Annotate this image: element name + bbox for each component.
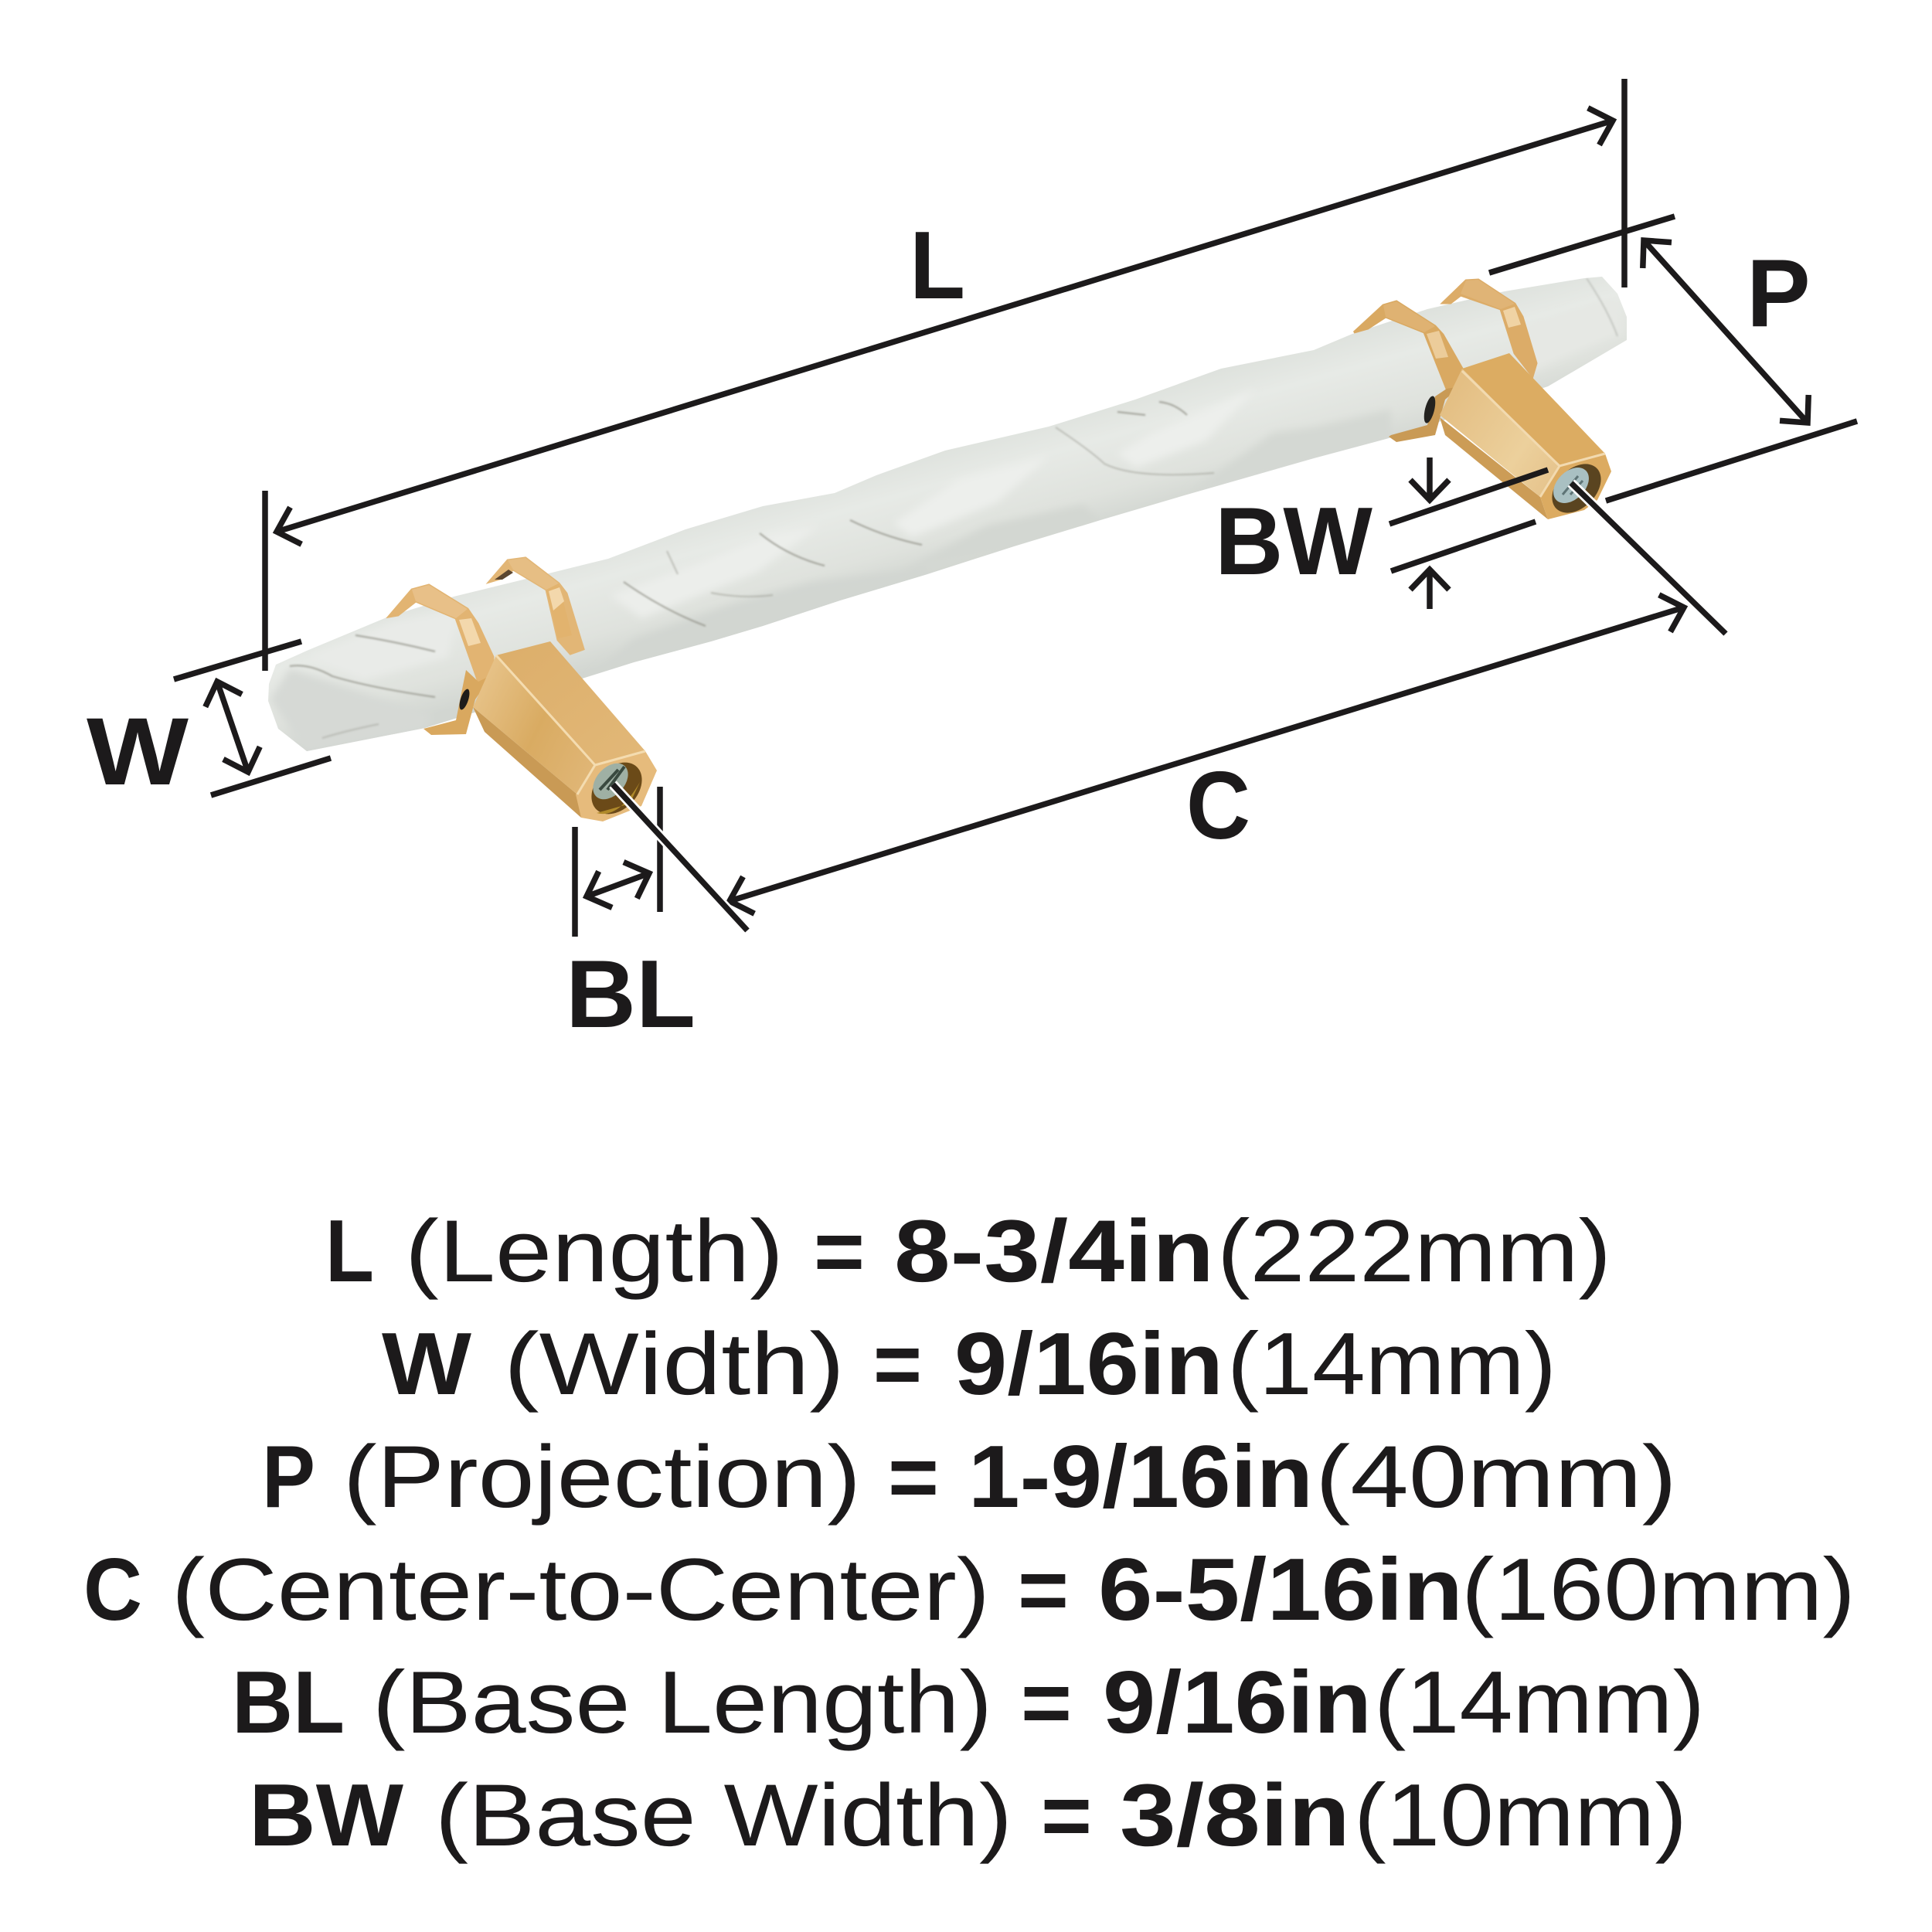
spec: base length — [232, 1654, 1705, 1752]
spec: center-to-center: C — [83, 1541, 142, 1639]
spec: width: = — [873, 1315, 922, 1413]
label W: W — [87, 699, 189, 805]
spec: width: 9/16in — [954, 1315, 1223, 1413]
dimension L — [265, 79, 1624, 671]
hole left — [581, 753, 652, 824]
back ring left — [489, 558, 583, 654]
spec: projection: (Projection) — [343, 1428, 861, 1526]
spec: width: (Width) — [504, 1315, 845, 1413]
spec: projection: (40mm) — [1315, 1428, 1677, 1526]
spec: base length: (Base Length) — [372, 1654, 992, 1752]
spec: base length: BL — [232, 1654, 345, 1752]
dimension BL — [566, 784, 747, 1048]
dimension W — [87, 641, 331, 805]
dimension BW — [1215, 457, 1548, 609]
spec: base width: (Base Width) — [435, 1767, 1012, 1865]
dimension C — [730, 483, 1726, 901]
front ring right — [1354, 301, 1462, 389]
illustration: marble handle with brass posts — [268, 277, 1627, 824]
front ring left — [389, 585, 493, 682]
dimension P — [1489, 216, 1857, 501]
spec: center-to-center: (Center-to-Center) — [172, 1541, 990, 1639]
spec: base width — [249, 1767, 1687, 1865]
spec: length: L — [325, 1202, 374, 1301]
label BL: BL — [566, 941, 696, 1048]
back ring right — [1443, 280, 1536, 376]
spec: base width: BW — [249, 1767, 403, 1865]
right post and rings — [1354, 280, 1611, 522]
spec: center-to-center: (160mm) — [1461, 1541, 1855, 1639]
post faces right — [1462, 353, 1605, 466]
spec: width — [382, 1315, 1556, 1413]
spec: base length: 9/16in — [1103, 1654, 1372, 1752]
post faces left — [496, 641, 645, 765]
spec: projection: 1-9/16in — [968, 1428, 1313, 1526]
spec: projection — [262, 1428, 1677, 1526]
spec: length — [325, 1202, 1611, 1301]
spec: base length: = — [1021, 1654, 1072, 1752]
label BW: BW — [1215, 488, 1372, 595]
spec: base width: = — [1041, 1767, 1092, 1865]
spec list — [83, 1202, 1855, 1865]
spec: length: 8-3/4in — [894, 1202, 1214, 1301]
marble bar — [268, 277, 1627, 753]
label L: L — [910, 213, 965, 319]
spec: center-to-center: 6-5/16in — [1098, 1541, 1463, 1639]
spec: projection: P — [262, 1428, 315, 1526]
left post and rings — [389, 558, 657, 824]
spec: length: (Length) — [405, 1202, 784, 1301]
hole right — [1543, 454, 1611, 522]
label C: C — [1186, 753, 1250, 859]
screw shadow left — [457, 688, 471, 711]
spec: width: (14mm) — [1227, 1315, 1556, 1413]
spec: length: (222mm) — [1217, 1202, 1611, 1301]
spec: base width: (10mm) — [1354, 1767, 1687, 1865]
spec: projection: = — [888, 1428, 939, 1526]
spec: center-to-center — [83, 1541, 1855, 1639]
label P: P — [1747, 240, 1811, 347]
spec: length: = — [814, 1202, 865, 1301]
spec: base length: (14mm) — [1374, 1654, 1705, 1752]
spec: width: W — [382, 1315, 471, 1413]
spec: center-to-center: = — [1018, 1541, 1069, 1639]
spec: base width: 3/8in — [1120, 1767, 1350, 1865]
